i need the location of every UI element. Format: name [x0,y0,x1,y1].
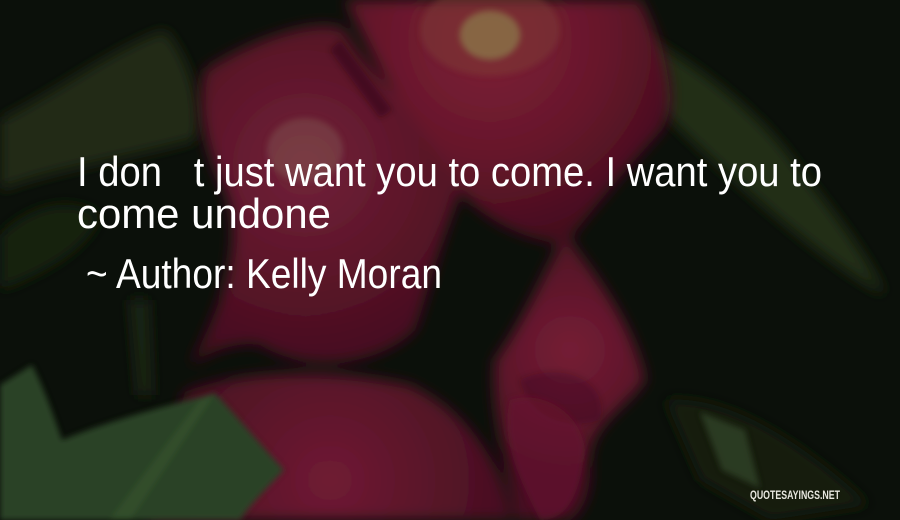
quote line 1: I don t just want you to come. I want you to [77,148,822,195]
quote line 2: come undone [77,190,331,237]
author line: ~ Author: Kelly Moran [86,250,442,297]
flowers [150,0,670,520]
watermark: QUOTESAYINGS.NET [750,488,840,502]
